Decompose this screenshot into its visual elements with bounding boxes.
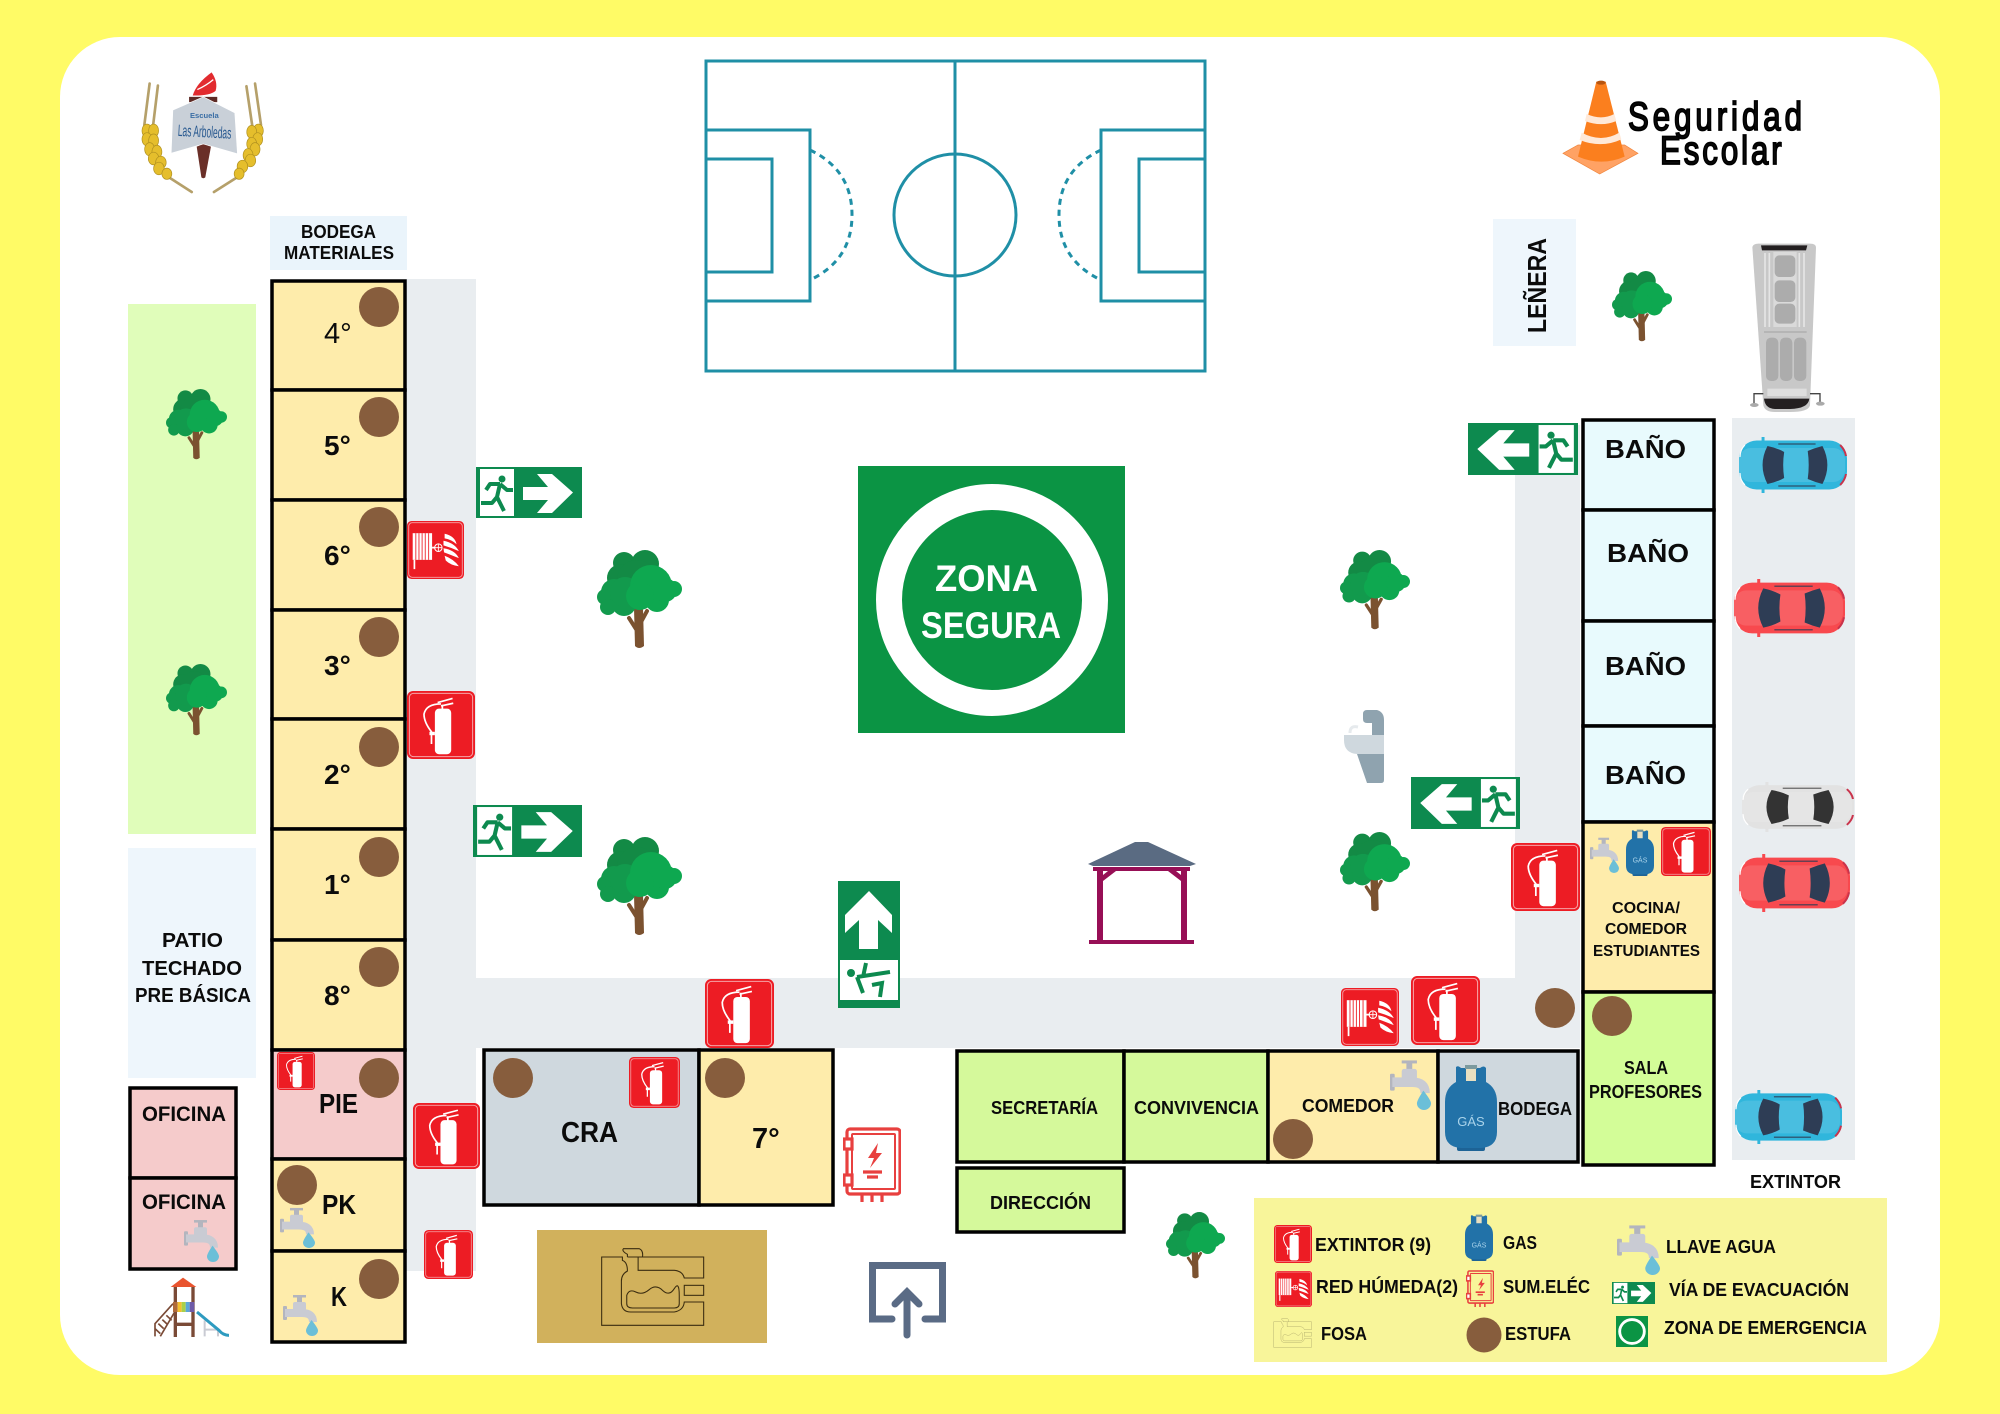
room: 1 <box>272 829 405 940</box>
panel: leñera <box>1493 219 1576 346</box>
zona segura <box>858 466 1125 733</box>
panel: secretaría <box>957 1051 1124 1162</box>
panel: patio techado: TECHADO <box>142 958 242 980</box>
school logo: Las Arboledas <box>177 121 232 142</box>
label: bodega materiales: MATERIALES <box>284 243 394 263</box>
icon: entrance <box>872 1266 942 1335</box>
legend: extintor <box>1274 1225 1431 1263</box>
icon: car blue <box>1739 437 1847 493</box>
brand: Seguridad Escolar <box>1563 81 1802 174</box>
room: baño 3 <box>1583 621 1714 726</box>
panel: fosa <box>537 1230 767 1343</box>
zona segura: SEGURA <box>921 605 1061 646</box>
panel: sala profesores <box>1583 992 1714 1165</box>
icon: bus <box>1750 244 1825 412</box>
football field <box>706 61 1205 371</box>
legend: gas: GAS <box>1503 1233 1537 1253</box>
label: bodega materiales: BODEGA <box>301 222 376 242</box>
extintor <box>705 979 774 1048</box>
room: PIE: PIE <box>319 1088 358 1119</box>
school logo: Escuela <box>190 111 219 120</box>
icon: car red 2 <box>1739 854 1850 912</box>
panel: patio techado <box>128 848 256 1078</box>
exit sign left <box>1468 423 1578 475</box>
room: K <box>272 1251 405 1342</box>
room: 6 <box>272 500 405 610</box>
panel: cocina: ESTUDIANTES <box>1593 943 1700 960</box>
zona segura: ZONA <box>935 558 1038 599</box>
icon: tree <box>1340 832 1410 911</box>
icon: tree <box>1166 1212 1225 1278</box>
room: 2 <box>272 719 405 829</box>
room: PK <box>272 1159 405 1251</box>
icon: car white <box>1742 782 1854 832</box>
legend: vía de evacuación: VÍA DE EVACUACIÓN <box>1669 1279 1849 1300</box>
panel: parking <box>1732 418 1855 1160</box>
panel: baños column <box>1583 420 1714 822</box>
icon: tree <box>166 664 227 735</box>
room: 5 <box>272 390 405 500</box>
legend: red húmeda <box>1275 1271 1458 1307</box>
room: K: K <box>331 1281 347 1312</box>
room: 8 <box>272 940 405 1050</box>
icon: playground slide <box>155 1278 229 1337</box>
legend: estufa <box>1466 1318 1571 1352</box>
icon: electrical panel <box>844 1129 900 1202</box>
legend: estufa: ESTUFA <box>1505 1324 1571 1344</box>
icon: car red <box>1734 579 1845 637</box>
panel: classroom column <box>272 281 405 1342</box>
room: baño 2 <box>1583 510 1714 621</box>
panel: comedor <box>1268 1051 1438 1162</box>
panel: secretaría: SECRETARÍA <box>991 1097 1098 1118</box>
title line 2: Escolar <box>1660 128 1782 173</box>
room: baño 1 <box>1583 420 1714 510</box>
room: baño 2: BAÑO <box>1607 538 1689 568</box>
room: PK: PK <box>322 1189 356 1220</box>
panel: sala profesores: PROFESORES <box>1589 1082 1702 1102</box>
panel: sala profesores: SALA <box>1624 1058 1668 1078</box>
room: baño 4: BAÑO <box>1605 760 1686 790</box>
label: bodega materiales <box>270 216 407 270</box>
panel: leñera: LEÑERA <box>1522 238 1552 333</box>
icon: tree <box>166 389 227 459</box>
extintor <box>1511 843 1580 911</box>
room: baño 4 <box>1583 726 1714 822</box>
legend: zona de emergencia <box>1616 1316 1867 1347</box>
panel: CRA <box>484 1050 699 1205</box>
panel: green strip <box>128 304 256 834</box>
exit sign up <box>838 881 900 1008</box>
panel: CRA: CRA <box>561 1117 618 1149</box>
icon: traffic cone <box>1563 81 1638 174</box>
room: 3: 3° <box>324 650 351 681</box>
panel: bodega <box>1438 1051 1578 1162</box>
extintor <box>407 691 475 759</box>
icon: tree <box>1612 271 1672 341</box>
icon: water fountain <box>1344 710 1384 783</box>
legend: zona de emergencia: ZONA DE EMERGENCIA <box>1664 1318 1867 1338</box>
school logo <box>142 72 263 192</box>
red húmeda <box>407 521 464 579</box>
panel: cocina <box>1583 822 1714 992</box>
room: 5: 5° <box>324 430 351 461</box>
icon: car blue 2 <box>1735 1090 1842 1144</box>
legend <box>1254 1198 1887 1362</box>
room: 1: 1° <box>324 869 351 900</box>
legend: red húmeda: RED HÚMEDA(2) <box>1316 1276 1458 1297</box>
icon: gazebo <box>1088 842 1196 944</box>
red húmeda <box>1341 988 1399 1046</box>
legend: suministro eléctrico <box>1466 1271 1590 1307</box>
room: 3 <box>272 610 405 719</box>
panel: patio techado: PRE BÁSICA <box>135 984 251 1007</box>
extintor <box>424 1230 473 1279</box>
panel: oficinas <box>130 1088 236 1269</box>
panel: convivencia: CONVIVENCIA <box>1134 1097 1259 1118</box>
extintor <box>1411 976 1480 1045</box>
panel: cocina: COCINA/ <box>1612 900 1681 917</box>
exit sign left <box>1411 777 1520 829</box>
room: PIE <box>272 1050 405 1159</box>
legend: suministro eléctrico: SUM.ELÉC <box>1503 1276 1590 1297</box>
legend: llave agua <box>1617 1225 1776 1275</box>
panel: 7: 7° <box>752 1123 780 1155</box>
room: 2: 2° <box>324 759 351 790</box>
room: 8: 8° <box>324 980 351 1011</box>
panel: oficinas: OFICINA <box>142 1191 226 1214</box>
panel: oficinas: OFICINA <box>142 1103 226 1126</box>
panel: bodega: BODEGA <box>1498 1098 1572 1119</box>
room: baño 1: BAÑO <box>1605 434 1686 464</box>
legend: vía de evacuación <box>1612 1279 1849 1304</box>
title line 1: Seguridad <box>1628 94 1802 139</box>
panel: dirección: DIRECCIÓN <box>990 1192 1091 1213</box>
panel: cocina: COMEDOR <box>1605 921 1687 938</box>
legend: fosa <box>1274 1319 1367 1347</box>
legend: gas <box>1465 1215 1537 1261</box>
corridors <box>406 279 1580 1271</box>
legend: llave agua: LLAVE AGUA <box>1666 1237 1776 1257</box>
room: 6: 6° <box>324 540 351 571</box>
room: 4 <box>272 281 405 390</box>
legend: extintor: EXTINTOR (9) <box>1315 1235 1431 1255</box>
panel: patio techado: PATIO <box>162 930 223 952</box>
icon: tree <box>597 837 682 935</box>
panel: comedor: COMEDOR <box>1302 1095 1394 1116</box>
icon: tree <box>597 550 682 648</box>
panel: 7 <box>699 1050 833 1205</box>
legend: fosa: FOSA <box>1321 1324 1367 1344</box>
extintor <box>413 1103 480 1169</box>
exit sign right <box>476 467 582 518</box>
label: extintor: EXTINTOR <box>1750 1172 1841 1192</box>
room: 4: 4° <box>324 318 352 350</box>
panel: convivencia <box>1124 1051 1268 1162</box>
estufa corredor <box>1535 988 1575 1028</box>
panel: dirección <box>957 1168 1124 1232</box>
room: baño 3: BAÑO <box>1605 651 1686 681</box>
exit sign right <box>473 805 582 857</box>
icon: tree <box>1340 550 1410 629</box>
